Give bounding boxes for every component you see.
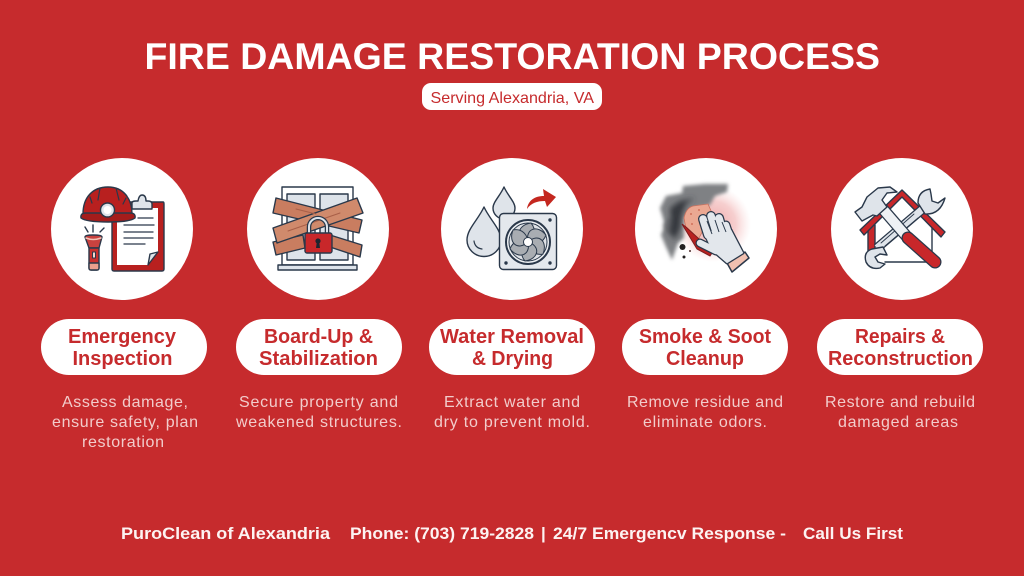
step description: Assess damage, xyxy=(62,394,188,411)
step heading: Smoke & Soot xyxy=(639,325,771,348)
step heading xyxy=(236,319,402,375)
step heading xyxy=(429,319,595,375)
step description: Restore and rebuild xyxy=(825,394,975,411)
step description xyxy=(434,394,590,431)
step heading: Water Removal xyxy=(440,325,584,348)
footer contact line: | xyxy=(541,524,546,543)
title: FIRE DAMAGE RESTORATION PROCESS xyxy=(144,36,880,77)
step description xyxy=(52,394,198,451)
step heading xyxy=(622,319,788,375)
panel: water removal and drying xyxy=(429,158,595,431)
icon: gloved hand wiping soot xyxy=(660,184,751,272)
step description xyxy=(825,394,975,431)
step heading xyxy=(817,319,983,375)
step description xyxy=(235,394,402,431)
subtitle badge xyxy=(422,83,602,110)
step heading: Repairs & xyxy=(855,325,945,348)
step description: ensure safety, plan xyxy=(52,414,198,431)
footer contact line: PuroClean of Alexandria xyxy=(121,524,331,543)
step heading: Cleanup xyxy=(666,347,744,370)
step description xyxy=(627,394,783,431)
step description: Remove residue and xyxy=(627,394,783,411)
step heading: Inspection xyxy=(72,347,172,370)
step heading xyxy=(41,319,207,375)
step heading: Reconstruction xyxy=(828,347,973,370)
step heading: Emergency xyxy=(68,325,177,348)
icon: water drops and exhaust fan xyxy=(467,187,556,270)
panel: board-up and stabilization xyxy=(235,158,402,431)
step heading: Stabilization xyxy=(259,347,378,370)
step heading: Board-Up & xyxy=(264,325,373,348)
step heading: & Drying xyxy=(472,347,553,370)
step description: damaged areas xyxy=(838,414,958,431)
panel: repairs and reconstruction xyxy=(817,158,983,431)
step description: dry to prevent mold. xyxy=(434,414,590,431)
panel: smoke and soot cleanup xyxy=(622,158,788,431)
step description: Extract water and xyxy=(444,394,580,411)
footer contact line xyxy=(121,524,903,543)
panel: emergency inspection xyxy=(41,158,207,451)
step description: eliminate odors. xyxy=(643,414,767,431)
footer contact line: 24/7 Emergencv Response - xyxy=(553,524,786,543)
step description: weakened structures. xyxy=(235,414,402,431)
icon: house with crossed hammer and wrench xyxy=(855,187,945,268)
footer contact line: Call Us First xyxy=(803,524,903,543)
icon: helmet, clipboard and flashlight xyxy=(81,187,164,271)
step description: Secure property and xyxy=(239,394,398,411)
footer contact line: Phone: (703) 719-2828 xyxy=(350,524,534,543)
step description: restoration xyxy=(82,434,164,451)
icon: boarded window with padlock xyxy=(273,187,363,270)
subtitle badge: Serving Alexandria, VA xyxy=(430,90,594,107)
